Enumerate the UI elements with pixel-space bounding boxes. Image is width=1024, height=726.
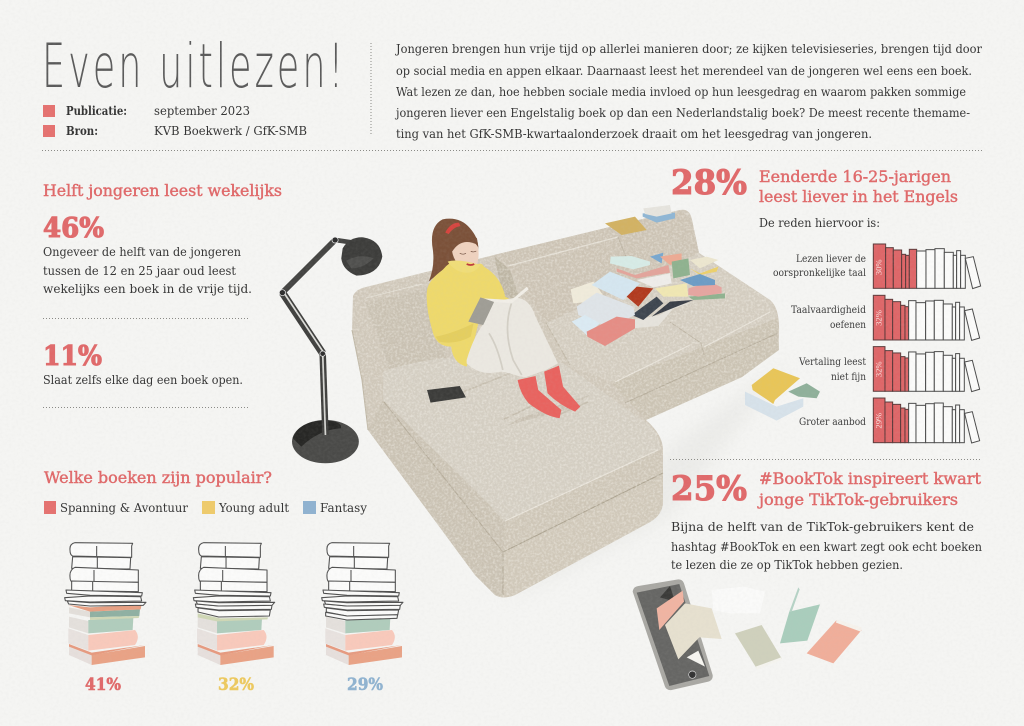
book stack 41%	[65, 543, 146, 665]
publication meta	[43, 104, 307, 138]
book stack 29%	[322, 543, 403, 665]
label: translation: Vertaling leest	[798, 356, 867, 368]
label: translation: niet fijn	[831, 371, 866, 383]
panel: BookTok	[671, 469, 982, 572]
intro text: Wat lezen ze dan, hoe hebben sociale media invloed op hun leesgedrag en waarom pakken sommige	[396, 85, 966, 99]
intro text: Jongeren brengen hun vrije tijd op allerlei manieren door; ze kijken televisieseries, brengen tijd door	[395, 42, 982, 56]
heading: leest liever in het Engels	[759, 187, 958, 206]
heading: Welke boeken zijn populair?	[44, 468, 272, 487]
legend: Fantasy	[320, 501, 367, 515]
value 29%: 29%	[347, 675, 383, 695]
heading: jonge TikTok-gebruikers	[757, 490, 958, 509]
illustration: phone with books	[633, 579, 862, 690]
text: 46%: Ongeveer de helft van de jongeren	[43, 245, 241, 259]
value 41%: 41%	[85, 675, 121, 695]
label: translation	[798, 356, 867, 383]
bookshelf 32% second: 32%	[873, 361, 883, 377]
right seat	[546, 253, 778, 382]
intro text: op social media en appen elkaar. Daarnaast leest het merendeel van de jongeren wel eens een boek.	[396, 64, 972, 78]
illustration: lamp	[279, 237, 382, 463]
illustration: sofa	[352, 210, 790, 605]
title: Even uitlezen!	[42, 30, 343, 102]
legend	[44, 501, 367, 515]
label: bron: Bron:	[66, 124, 98, 138]
body text: te lezen die ze op TikTok hebben gezien.	[671, 558, 903, 572]
marker: publicatie	[43, 105, 55, 117]
stat 46%: 46%	[43, 213, 104, 244]
panel: English reading	[671, 163, 981, 443]
label: original language	[773, 253, 867, 279]
stat 11%: 11%	[43, 341, 102, 372]
label: language skills: oefenen	[830, 319, 866, 331]
stat 28%: 28%	[671, 163, 747, 203]
intro text: ting van het GfK-SMB-kwartaalonderzoek draait om het leesgedrag van jongeren.	[396, 127, 872, 141]
text: 11%: Slaat zelfs elke dag een boek open.	[43, 373, 243, 387]
label: original language: Lezen liever de	[796, 253, 866, 265]
heading: #BookTok inspireert kwart	[759, 469, 982, 488]
text: 46%	[43, 245, 252, 296]
label: language skills: Taalvaardigheid	[791, 304, 866, 316]
bookshelf 32% second	[873, 347, 980, 392]
body text: hashtag #BookTok en een kwart zegt ook echt boeken	[671, 540, 982, 554]
bookshelf 29%	[873, 398, 980, 443]
body text: Bijna de helft van de TikTok-gebruikers kent de	[671, 520, 974, 534]
value: bron: KVB Boekwerk / GfK-SMB	[154, 124, 307, 138]
stat 25%: 25%	[671, 469, 747, 509]
illustration: books on floor	[745, 368, 820, 421]
marker: bron	[43, 125, 55, 137]
intro text	[394, 42, 982, 141]
bookshelf 32%: 32%	[873, 310, 883, 326]
chaise	[368, 400, 505, 597]
body text	[671, 520, 982, 572]
heading: Helft jongeren leest wekelijks	[43, 181, 282, 200]
back cushion	[494, 210, 699, 323]
value 32%: 32%	[218, 675, 254, 695]
illustration: tablet	[427, 386, 466, 403]
heading: Eenderde 16-25-jarigen	[759, 167, 951, 186]
bookshelf 30%: 30%	[874, 259, 884, 275]
bookshelf 29%: 29%	[873, 413, 883, 429]
heading	[757, 469, 982, 509]
text: 46%: wekelijks een boek in de vrije tijd.	[43, 282, 252, 296]
panel: popular genres	[44, 468, 403, 695]
label: original language: oorspronkelijke taal	[773, 267, 867, 279]
intro text: jongeren liever een Engelstalig boek op dan een Nederlandstalig boek? De meest recente themame-	[394, 106, 970, 120]
subheading: De reden hiervoor is:	[759, 216, 880, 230]
label: language skills	[791, 304, 866, 331]
label: publicatie: Publicatie:	[66, 104, 127, 118]
value: publicatie: september 2023	[154, 104, 250, 118]
text: 46%: tussen de 12 en 25 jaar oud leest	[43, 264, 236, 278]
legend: Spanning & Avontuur	[60, 501, 188, 515]
panel: weekly readers	[43, 181, 282, 408]
legend: Young adult	[218, 501, 289, 515]
bookshelf 30%	[873, 244, 981, 289]
label: supply: Groter aanbod	[799, 416, 866, 428]
illustration: book pile on sofa	[571, 205, 725, 346]
heading	[759, 167, 958, 206]
book stack 32%	[193, 543, 275, 665]
illustration: girl reading	[427, 219, 580, 418]
bookshelf 32%	[873, 295, 980, 340]
